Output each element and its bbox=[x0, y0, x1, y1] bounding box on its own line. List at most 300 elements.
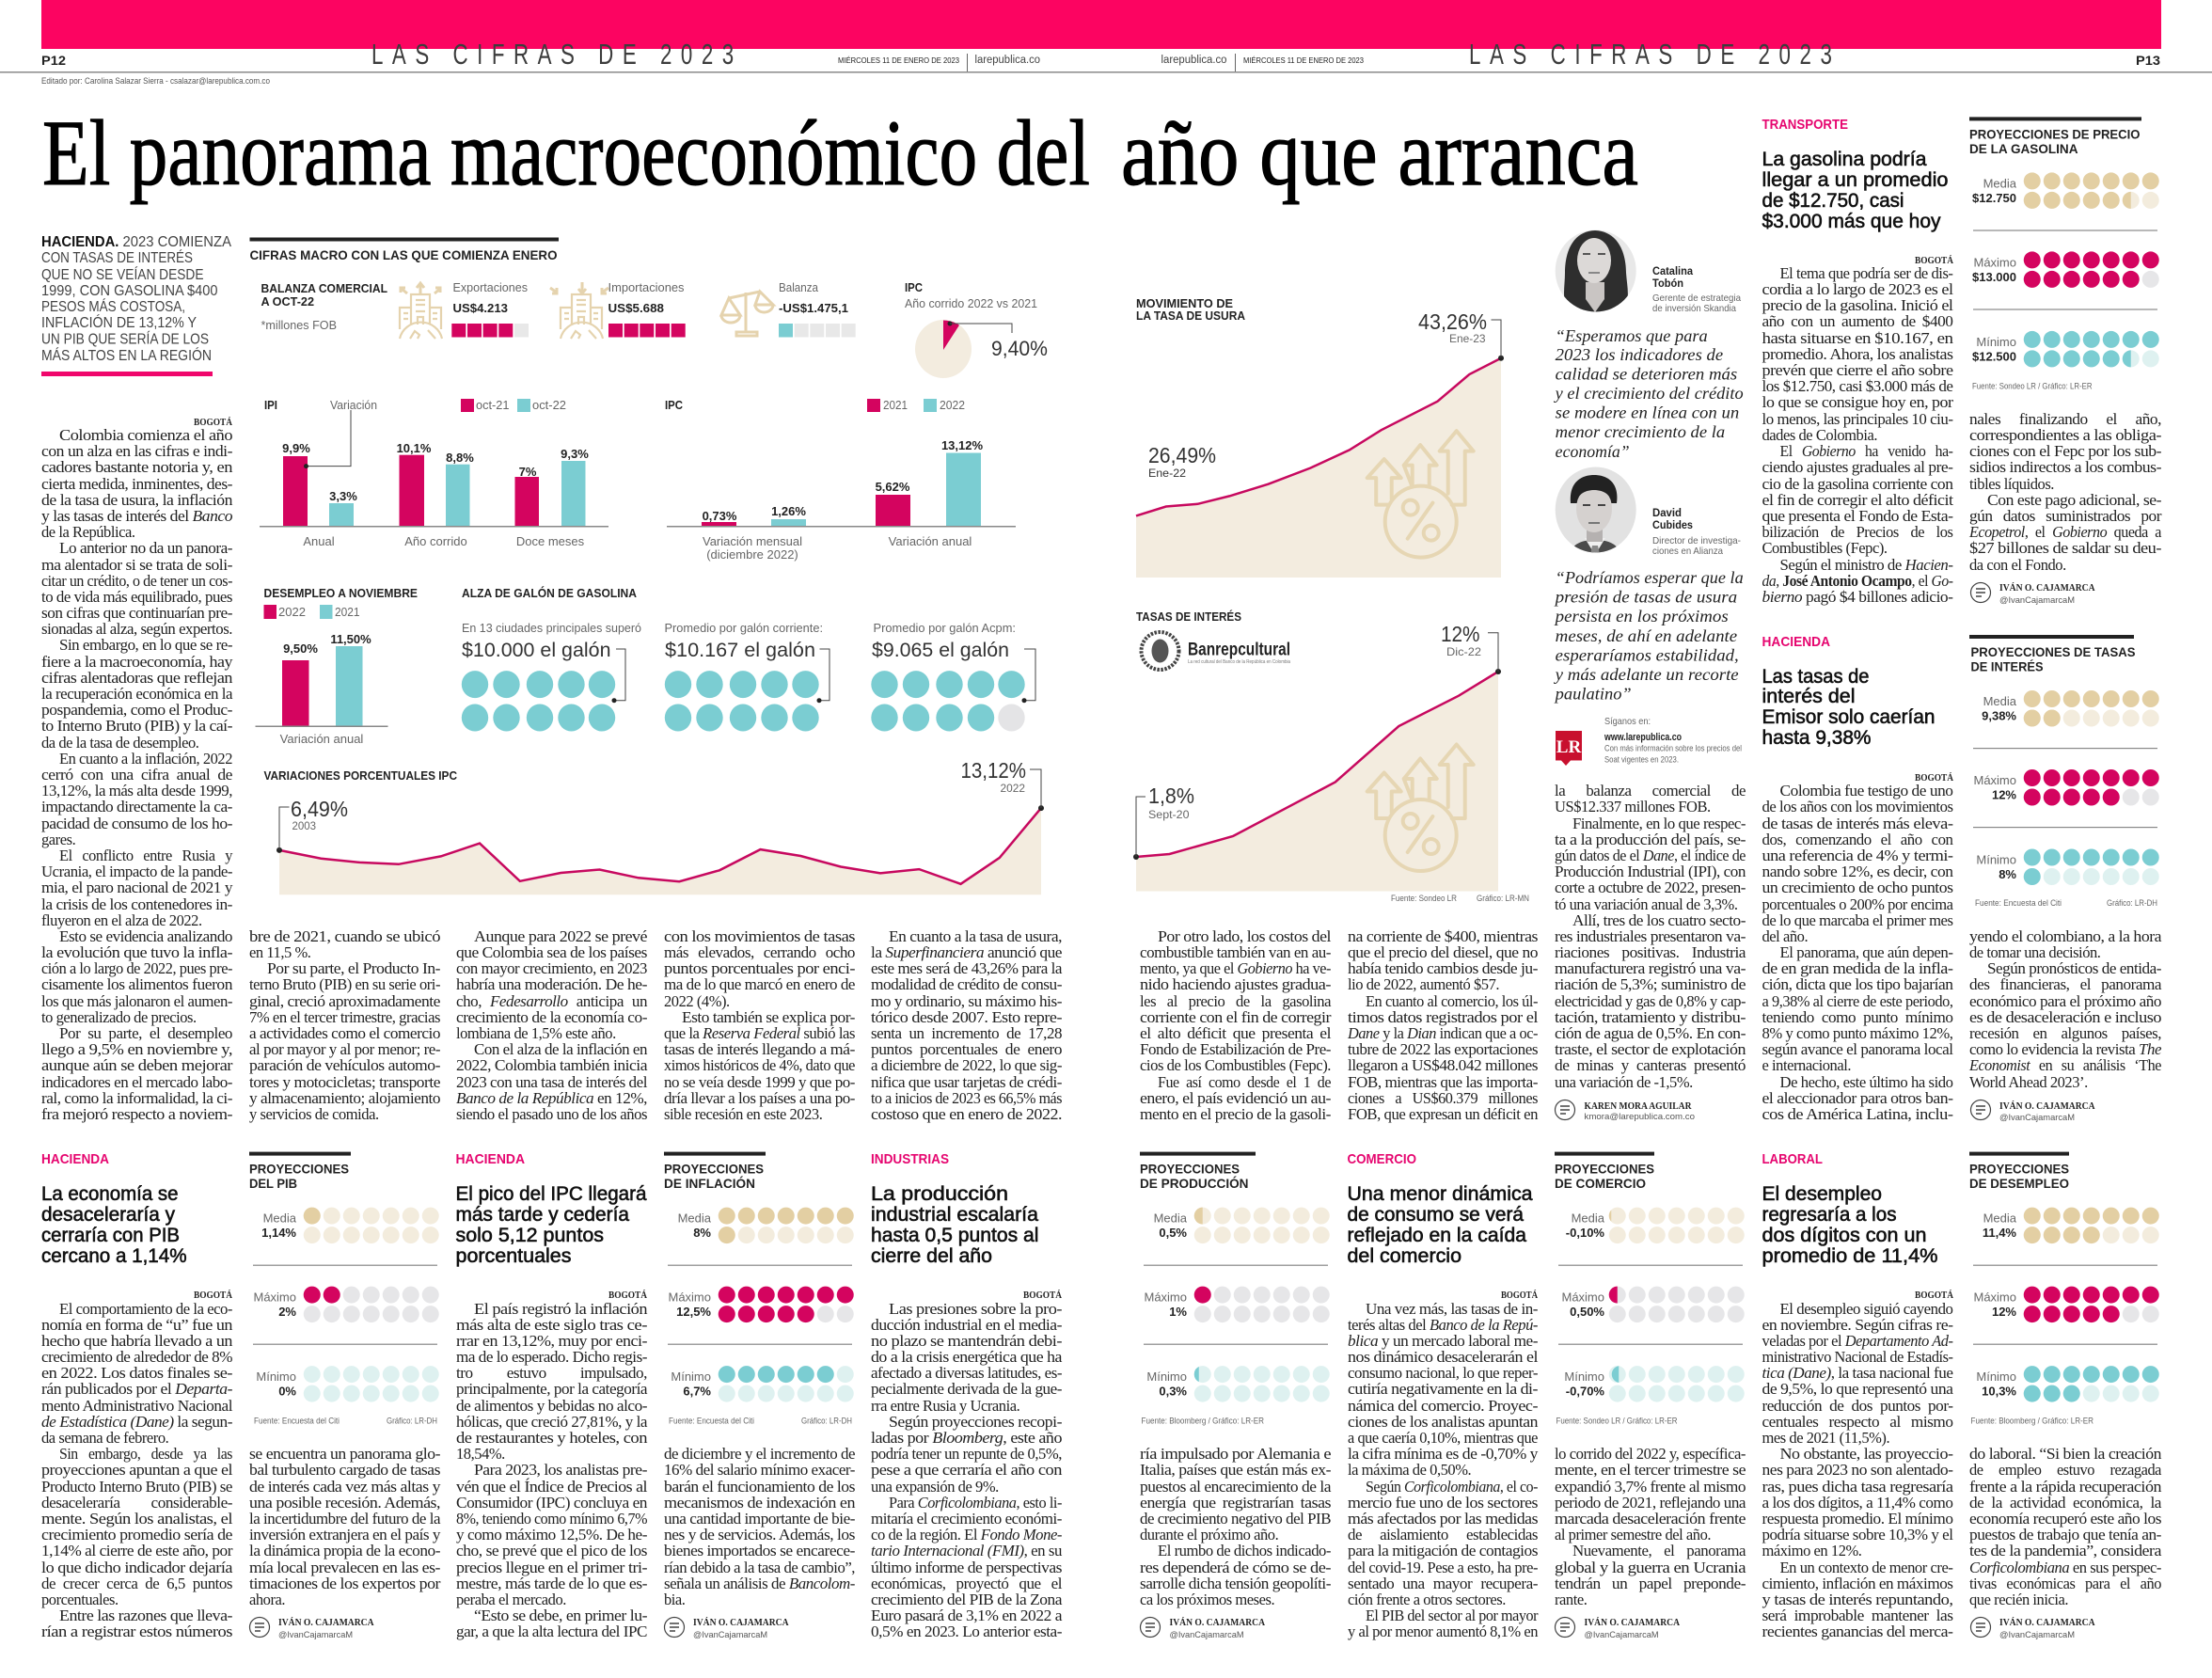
chart: variaciones porcentuales IPC: 2003 bbox=[292, 819, 316, 832]
text block: economía column 1: hecho que habría llevado a un bbox=[41, 1332, 232, 1350]
row labels: Mínimo bbox=[1976, 335, 2016, 349]
article heading: pico del IPC: HACIENDA bbox=[455, 1151, 525, 1167]
text block: comercio column 2: marcada desaceleración frente bbox=[1555, 1510, 1746, 1528]
text block: tasas column 1: e internacional. bbox=[1762, 1056, 1851, 1074]
quote: Catalina Tobón: calidad se deterioren más bbox=[1556, 365, 1737, 384]
article heading: Hacienda tasas: hasta 9,38% bbox=[1762, 727, 1872, 749]
text block: balanza comercial column: Finalmente, en lo que respec- bbox=[1572, 815, 1746, 832]
dot rows bbox=[727, 1216, 845, 1394]
text block: economía column 1: de Estadística (Dane) la segun- bbox=[41, 1413, 232, 1431]
text block: tasas column 1: cos de América Latina, inclu- bbox=[1762, 1105, 1953, 1123]
article heading: economía PIB: HACIENDA bbox=[41, 1151, 109, 1167]
text block: IPC column 1 bbox=[456, 1300, 648, 1640]
text block: producción column 2: res dependerá de cómo se de- bbox=[1140, 1559, 1331, 1576]
text block: gasolina column 2: tibles líquidos. bbox=[1969, 475, 2054, 493]
text block: comercio column 1: consumo nacional, lo que reper- bbox=[1348, 1364, 1538, 1382]
text block: balanza comercial column: tación, tratamiento y distribu- bbox=[1555, 1008, 1746, 1026]
text block: right page column 1 top: el alto déficit que presenta el bbox=[1140, 1024, 1332, 1042]
panel: alza de galón de gasolina: Promedio por galón Acpm: bbox=[873, 621, 1016, 635]
callout: síganos en larepublica.co: Con más información sobre los precios del bbox=[1604, 743, 1742, 752]
text block: column 5 top: nifica que usar tarjetas de crédi- bbox=[871, 1073, 1062, 1091]
text block: right page column 1 top: corriente con el fin de corregir bbox=[1140, 1008, 1332, 1026]
chart: tasas de interés: Gráfico: LR-MN bbox=[1477, 894, 1529, 903]
text block: IPC column 2: mecanismos de indexación en bbox=[664, 1494, 855, 1512]
row labels: Máximo bbox=[668, 1290, 711, 1305]
text block: column 5 top: a diciembre de 2022, lo que sig- bbox=[871, 1056, 1062, 1074]
text block: main article column 1: de la República. bbox=[41, 523, 135, 541]
text block: column 4 top bbox=[664, 927, 855, 1123]
text block: right page column 2 top: En cuanto al comercio, los úl- bbox=[1366, 992, 1538, 1010]
text block: column 3 top: Aunque para 2022 se prevé bbox=[474, 927, 647, 945]
text block: economía column 2 bbox=[249, 1445, 441, 1608]
text block: producción column 1: Según proyecciones recopi- bbox=[889, 1413, 1062, 1431]
text block: tasas column 2: World Ahead 2023’. bbox=[1969, 1073, 2088, 1091]
article heading: laboral: dos dígitos con un bbox=[1762, 1225, 1926, 1246]
text block: producción column 1: 0,5% en 2023. Lo anterior esta- bbox=[871, 1623, 1062, 1640]
text block: gasolina column 2 bbox=[1968, 410, 2162, 574]
panel: proyecciones de tasas de interés: Fuente: Encuesta del Citi bbox=[1975, 898, 2062, 908]
panel: balanza comercial: Importaciones bbox=[608, 280, 685, 294]
text block: laboral column 2: de empleo estuvo rezagada bbox=[1969, 1461, 2162, 1479]
text block: tasas column 2: como lo evidencia la revista The bbox=[1969, 1040, 2161, 1058]
text block: economía column 1: Producto Interno Bruto (PIB) se bbox=[41, 1478, 232, 1496]
panel heading: PROYECCIONES bbox=[1140, 1162, 1240, 1177]
text block: balanza comercial column: tó una variación anual de 3,3%. bbox=[1555, 895, 1738, 913]
text block: column 5 top: mo y ordinario, su máximo his- bbox=[871, 992, 1062, 1010]
page header bbox=[0, 38, 2212, 86]
text block: IPC column 1: 18,54%. bbox=[456, 1445, 505, 1463]
row labels: 12% bbox=[1992, 788, 2016, 801]
text block: economía column 1: mente. Según los analistas, el bbox=[41, 1510, 233, 1528]
byline: Iván O. Cajamarca comercio: IVÁN O. CAJAMARCA bbox=[1584, 1617, 1680, 1628]
text block: right page column 2 top: FOB, mientras que las importa- bbox=[1348, 1073, 1538, 1091]
text block: column 4 top: no se veía desde 1999 y que po- bbox=[664, 1073, 855, 1091]
panel: proyecciones de inflación: Gráfico: LR-DH bbox=[801, 1417, 852, 1426]
text block: laboral column 1: a los dos dígitos, a 11,4% como bbox=[1762, 1494, 1953, 1512]
byline: Iván O. Cajamarca IPC: IVÁN O. CAJAMARCA bbox=[693, 1617, 789, 1628]
text block: producción column 1: podría tener un repunte de 0,5%, bbox=[871, 1445, 1062, 1463]
quote: Catalina Tobón bbox=[1552, 226, 1744, 461]
article heading: pico del IPC: más tarde y cedería bbox=[455, 1204, 629, 1226]
chart: movimiento de la tasa de usura: Ene-22 bbox=[1148, 467, 1186, 480]
article heading: comercio bbox=[1347, 1151, 1539, 1301]
text block: right page column 2 top: FOB, que expresan un déficit en bbox=[1348, 1105, 1538, 1123]
panel heading bbox=[1969, 1152, 2069, 1191]
text block: gasolina column 1: da, José Antonio Ocampo, el Go- bbox=[1762, 572, 1952, 590]
panel: balanza comercial: Balanza bbox=[779, 280, 819, 294]
row labels: Media bbox=[1572, 1211, 1605, 1226]
text block: column 3 top: cho, Fedesarrollo anticipa un bbox=[456, 992, 647, 1010]
text block: comercio column 2: tendrán un papel preponde- bbox=[1555, 1575, 1746, 1592]
text block: main article column 1: los que más jalonaron el aumen- bbox=[41, 992, 232, 1010]
text block: main article column 1: Esto se evidencia analizando bbox=[59, 927, 232, 945]
text block: column 4 top: puntos porcentuales por enci- bbox=[664, 959, 855, 977]
text block: gasolina column 2: nales finalizando el año, bbox=[1969, 410, 2161, 428]
row labels: 8% bbox=[1999, 867, 2016, 881]
text block: balanza comercial column: res industriales presentaron va- bbox=[1555, 927, 1746, 945]
text block: main article column 1: fiere a la macroeconomía, hay bbox=[41, 653, 233, 671]
article heading: producción industrial: La producción bbox=[871, 1183, 1008, 1205]
text block: main article column 1: indicadores en el mercado labo- bbox=[41, 1073, 232, 1091]
text block: comercio column 1: ción frente a otros sectores. bbox=[1348, 1591, 1506, 1608]
text block: comercio column 1: la cifra mínima es de -0,70% y bbox=[1348, 1445, 1539, 1463]
text block: comercio column 2 bbox=[1555, 1445, 1746, 1608]
dateline: Bogotá: BOGOTÁ bbox=[194, 417, 233, 428]
dot rows bbox=[2032, 181, 2151, 367]
article: transporte gasolina: La gasolina podría bbox=[1762, 149, 1927, 170]
byline: Iván O. Cajamarca laboral: IVÁN O. CAJAMARCA bbox=[1999, 1617, 2095, 1628]
text block: comercio column 1: y al por menor aumentó 8,1% en bbox=[1348, 1623, 1538, 1640]
text block: comercio column 2: expandió 3,7% frente al mismo bbox=[1555, 1478, 1746, 1496]
row labels: 8% bbox=[693, 1226, 711, 1240]
deck: Hacienda summary bbox=[41, 234, 231, 376]
text block: column 5 top: En cuanto a la tasa de usura, bbox=[889, 927, 1062, 945]
text block: economía column 1: proyecciones apuntan a que el bbox=[41, 1461, 233, 1479]
chart: IPI bars bbox=[260, 398, 608, 548]
photo: David Cubides bbox=[1556, 467, 1636, 553]
text block: right page column 2 top: que el precio del diesel, que no bbox=[1348, 943, 1538, 961]
text block: comercio column 1: de aislamiento establecidas bbox=[1348, 1526, 1538, 1543]
icon: scale bbox=[721, 292, 773, 336]
text block: economía column 1: rían a registrar estos números bbox=[41, 1623, 232, 1640]
text block: tasas column 2: des financieras, el panorama bbox=[1969, 975, 2162, 993]
text block: column 2 top: bre de 2021, cuando se ubicó bbox=[249, 927, 440, 945]
chart: IPI bars: 7% bbox=[519, 465, 537, 479]
text block: main article column 1: ral, como la informalidad, la ci- bbox=[41, 1089, 232, 1107]
article heading: producción industrial bbox=[871, 1151, 1063, 1301]
panel: alza de galón de gasolina: $9.065 el galón bbox=[872, 640, 1009, 661]
text block: comercio column 2: Nuevamente, el panorama bbox=[1572, 1542, 1746, 1559]
logo: Banrepcultural bbox=[1142, 632, 1290, 670]
quote: David Cubides: Cubides bbox=[1652, 518, 1693, 531]
text block: IPC column 2: una cantidad importante de bie- bbox=[664, 1510, 855, 1528]
text block: producción column 1: no plazo se mantendrán debi- bbox=[871, 1332, 1062, 1350]
text block: column 4 top: 2022 (4%). bbox=[664, 992, 730, 1010]
byline: Iván O. Cajamarca comercio bbox=[1556, 1617, 1680, 1640]
text block: IPC column 1: Para 2023, los analistas pre- bbox=[474, 1461, 647, 1479]
text block: gasolina column 1: Según el ministro de Hacien- bbox=[1779, 556, 1952, 574]
chart: desempleo a noviembre: 9,50% bbox=[283, 641, 318, 656]
text block: column 4 top: más elevados, cerrando ocho bbox=[664, 943, 855, 961]
deck: Hacienda summary: PESOS MÁS COSTOSA, bbox=[41, 297, 185, 315]
text block: gasolina column 1: lo menos, las principales 10 ciu- bbox=[1762, 410, 1952, 428]
panel heading bbox=[1140, 1152, 1256, 1191]
panel: proyecciones de precio de la gasolina: Fuente: Sondeo LR / Gráfico: LR-ER bbox=[1972, 381, 2093, 390]
deck: Hacienda summary: QUE NO SE VEÍAN DESDE bbox=[41, 265, 203, 283]
text block: comercio column 1: námica del comercio. Proyec- bbox=[1348, 1397, 1538, 1415]
chart: IPC bars: 1,26% bbox=[771, 504, 806, 518]
quote: David Cubides: presión de tasas de usura bbox=[1554, 588, 1737, 607]
text block: IPC column 2: señala un análisis de Bancolom- bbox=[664, 1575, 855, 1592]
row labels: Media bbox=[1983, 176, 2017, 190]
text block: main article column 1: to Interno Bruto (PIB) y la caí- bbox=[41, 717, 232, 735]
text block: IPC column 2: rían debido a la tasa de cambio”, bbox=[664, 1559, 855, 1576]
article heading: comercio: de consumo se verá bbox=[1347, 1204, 1524, 1226]
text block: column 2 top: Por su parte, el Producto In- bbox=[267, 959, 440, 977]
text block: producción column 2: Italia, países que están más ex- bbox=[1140, 1461, 1331, 1479]
dot rows bbox=[2032, 1216, 2151, 1394]
text block: economía column 2: mía local prevalecen en las es- bbox=[249, 1559, 440, 1576]
text block: producción column 1: co de la región. El Fondo Mone- bbox=[871, 1526, 1062, 1543]
row labels: Máximo bbox=[253, 1290, 296, 1305]
deck: Hacienda summary: HACIENDA. 2023 COMIENZA bbox=[41, 234, 231, 250]
row labels: -0,10% bbox=[1566, 1226, 1604, 1240]
article heading: Hacienda tasas: HACIENDA bbox=[1762, 634, 1830, 650]
panel: balanza comercial: *millones FOB bbox=[261, 318, 337, 332]
row labels: Media bbox=[1154, 1211, 1188, 1226]
text block: tasas column 1: ción, dicta que los tipo bajarían bbox=[1762, 975, 1953, 993]
dot rows bbox=[312, 1216, 431, 1394]
text block: laboral column 1: respuesta promedio. El mínimo bbox=[1762, 1510, 1953, 1528]
chart: IPI bars: 10,1% bbox=[397, 441, 432, 455]
text block: main article column 1: de la tasa de usura, la inflación bbox=[41, 491, 232, 509]
text block: column 3 top: lombiana de 1,5% este año. bbox=[456, 1024, 616, 1042]
panel: proyecciones de tasas de interés bbox=[1969, 635, 2157, 908]
panel: proyecciones de inflación bbox=[664, 1152, 852, 1426]
text block: producción column 1: económicas, proyectó que el bbox=[871, 1575, 1063, 1592]
text block: economía column 1: mento Administrativo Nacional bbox=[41, 1397, 233, 1415]
panel heading: DE LA GASOLINA bbox=[1969, 141, 2078, 156]
text block: main article column 1: aunque aún se deben mejorar bbox=[41, 1056, 233, 1074]
text block: economía column 1: rán publicados por el Departa- bbox=[41, 1380, 232, 1398]
chart: desempleo a noviembre: Variación anual bbox=[280, 732, 363, 746]
byline: Iván O. Cajamarca producción: @IvanCajamarcaM bbox=[1170, 1630, 1244, 1640]
panel: proyecciones de inflación: Fuente: Encuesta del Citi bbox=[669, 1417, 754, 1426]
text block: comercio column 1: Según Corficolombiana, el co- bbox=[1366, 1478, 1538, 1496]
article heading: economía PIB: desaceleraría y bbox=[41, 1204, 175, 1226]
text block: main article column 1: El conflicto entre Rusia y bbox=[59, 847, 233, 864]
text block: IPC column 1: rrar en 13,12%, muy por enci- bbox=[456, 1332, 647, 1350]
text block: IPC column 1: tro estuvo impulsado, bbox=[456, 1364, 647, 1382]
text block: right page column 1 top: mento, ya que el Gobierno ha ve- bbox=[1140, 959, 1331, 977]
article heading: producción industrial: industrial escalaría bbox=[871, 1204, 1038, 1226]
panel: balanza comercial bbox=[261, 280, 856, 339]
text block: economía column 1: porcentuales. bbox=[41, 1591, 118, 1608]
text block: producción column 1: Euro pasará de 3,1% en 2022 a bbox=[871, 1607, 1063, 1624]
chart: desempleo a noviembre: 2022 bbox=[278, 605, 306, 619]
byline: Iván O. Cajamarca tasas bbox=[1971, 1100, 2095, 1123]
text block: IPC column 1: y como máximo 12,5%. De he- bbox=[456, 1526, 647, 1543]
panel: proyecciones de precio de la gasolina bbox=[1969, 117, 2157, 390]
text block: column 3 top: siendo el pasado uno de los años bbox=[456, 1105, 647, 1123]
text block: main article column 1: y las tasas de interés del Banco bbox=[41, 507, 232, 525]
byline: Iván O. Cajamarca economía bbox=[250, 1617, 374, 1640]
quote: David Cubides: ciones en Alianza bbox=[1652, 546, 1723, 557]
text block: comercio column 1: Una vez más, las tasas de in- bbox=[1366, 1300, 1538, 1318]
text block: balanza comercial column: electricidad y gas de 0,8% y cap- bbox=[1555, 992, 1746, 1010]
byline: Iván O. Cajamarca laboral bbox=[1971, 1617, 2095, 1640]
text block: IPC column 1: precios llegue en el primer tri- bbox=[456, 1559, 647, 1576]
text block: tasas column 1: de lo que marcaba el primer mes bbox=[1762, 911, 1953, 929]
text block: gasolina column 1: prevén que cierre el año sobre bbox=[1762, 361, 1953, 379]
text block: tasas column 1: teniendo como punto mínimo bbox=[1762, 1008, 1953, 1026]
row labels: Mínimo bbox=[1976, 852, 2016, 867]
text block: tasas column 1: Colombia fue testigo de uno bbox=[1779, 782, 1953, 799]
panel heading bbox=[1555, 1152, 1654, 1191]
text block: laboral column 1: En un contexto de menor cre- bbox=[1779, 1559, 1952, 1576]
text block: economía column 1: Entre las razones que lleva- bbox=[59, 1607, 232, 1624]
text block: gasolina column 2: da con el Fondo. bbox=[1969, 556, 2066, 574]
text block: right page column 2 top: timos datos registrados por el bbox=[1348, 1008, 1539, 1026]
text block: comercio column 2: global y la guerra en Ucrania bbox=[1555, 1559, 1746, 1576]
text block: tasas column 1: El panorama, que aún depen- bbox=[1779, 943, 1952, 961]
panel heading: DE COMERCIO bbox=[1555, 1176, 1646, 1191]
text block: column 5 top: tórico desde 2007. Esto repre- bbox=[871, 1008, 1062, 1026]
text block: comercio column 1: cutiría negativamente en la di- bbox=[1348, 1380, 1538, 1398]
byline: Iván O. Cajamarca economía: IVÁN O. CAJAMARCA bbox=[278, 1617, 374, 1628]
text block: column 4 top: que la Reserva Federal subió las bbox=[664, 1024, 855, 1042]
chart: tasas de interés: Sept-20 bbox=[1148, 808, 1190, 821]
byline: Iván O. Cajamarca tasas: @IvanCajamarcaM bbox=[1999, 1113, 2075, 1123]
text block: producción column 1: mitaría el crecimiento económi- bbox=[871, 1510, 1062, 1528]
article heading: pico del IPC bbox=[455, 1151, 648, 1301]
text block: balanza comercial column: US$12.337 millones FOB. bbox=[1555, 798, 1711, 815]
article heading: pico del IPC: solo 5,12 puntos bbox=[455, 1225, 604, 1246]
article heading: producción industrial: cierre del año bbox=[871, 1245, 992, 1267]
text block: laboral column 1: y tasas de interés repuntando, bbox=[1762, 1591, 1953, 1608]
text block: column 5 top: modalidad de crédito de consu- bbox=[871, 975, 1062, 993]
text block: right page column 1 top: Fondo de Estabilización de Pre- bbox=[1140, 1040, 1331, 1058]
quote: David Cubides: “Podríamos esperar que la bbox=[1556, 568, 1744, 587]
panel: proyecciones del PIB: Gráfico: LR-DH bbox=[387, 1417, 437, 1426]
text block: laboral column 2: puestos de trabajo que tenía an- bbox=[1969, 1526, 2161, 1543]
squares: exportaciones bbox=[451, 324, 529, 337]
row labels bbox=[1973, 694, 2017, 881]
panel: proyecciones de desempleo bbox=[1969, 1152, 2157, 1426]
text block: laboral column 2: economía recuperó este año los bbox=[1969, 1510, 2161, 1528]
quote: Catalina Tobón: de inversión Skandia bbox=[1652, 303, 1736, 314]
text block: balanza comercial column: gún datos de el Dane, el índice de bbox=[1555, 847, 1746, 864]
article: transporte gasolina: BOGOTÁ bbox=[1915, 255, 1954, 266]
byline: Karen Mora Aguilar: kmora@larepublica.com.co bbox=[1584, 1112, 1695, 1122]
text block: column 2 top: paración de vehículos automo- bbox=[249, 1056, 440, 1074]
text block: economía column 1: nomía en forma de “u” fue un bbox=[41, 1316, 232, 1334]
chart: movimiento de la tasa de usura: MOVIMIENTO DE bbox=[1136, 296, 1233, 310]
chart: IPC pie: Año corrido 2022 vs 2021 bbox=[905, 296, 1037, 310]
panel heading: DEL PIB bbox=[249, 1176, 297, 1191]
text block: column 4 top: sible recesión en este 2023. bbox=[664, 1105, 823, 1123]
text block: main article column 1: fluyeron en el alza de 2022. bbox=[41, 911, 202, 929]
squares: importaciones bbox=[608, 324, 686, 337]
text block: column 2 top: a actividades como el comercio bbox=[249, 1024, 440, 1042]
text block: comercio column 2: lo corrido del 2022 y, específica- bbox=[1555, 1445, 1746, 1463]
text block: economía column 1: Sin embargo, desde ya las bbox=[59, 1445, 232, 1463]
text block: column 2 top: 7% en el tercer trimestre, gracias bbox=[249, 1008, 440, 1026]
page header: larepublica.co bbox=[1161, 55, 1226, 66]
chart: IPI bars: Año corrido bbox=[404, 534, 467, 548]
text block: main article column 1: cadores bastante notoria y, en bbox=[41, 458, 232, 476]
text block: IPC column 1: hólicas, que creció 27,81%, y la bbox=[456, 1413, 648, 1431]
quote: David Cubides: David bbox=[1652, 506, 1682, 519]
chart: IPC bars: 2021 bbox=[883, 398, 908, 412]
article: transporte gasolina bbox=[1762, 117, 1954, 266]
icon: percent with rising arrows bbox=[1367, 431, 1474, 558]
panel: alza de galón de gasolina: ALZA DE GALÓN DE GASOLINA bbox=[462, 586, 638, 600]
text block: gasolina column 2: $27 billones de saldar su deu- bbox=[1969, 539, 2161, 557]
text block: comercio column 2: rante. bbox=[1555, 1591, 1588, 1608]
text block: economía column 1: en 2022. Los datos finales se- bbox=[41, 1364, 232, 1382]
text block: gasolina column 1: año con un aumento de $400 bbox=[1762, 312, 1953, 330]
chart: tasas de interés: Dic-22 bbox=[1446, 645, 1481, 658]
page header: LAS CIFRAS DE 2023 bbox=[371, 38, 734, 71]
text block: right page column 1 top: Por otro lado, los costos del bbox=[1158, 927, 1332, 945]
text block: balanza comercial column: riaciones positivas. Industria bbox=[1555, 943, 1746, 961]
panel heading: PROYECCIONES bbox=[1555, 1162, 1654, 1177]
text block: producción column 2: energía que registrarían tasas bbox=[1140, 1494, 1331, 1512]
text block: IPC column 1: principalmente, por la categoría bbox=[456, 1380, 648, 1398]
text block: economía column 2: la dinámica propia de la econo- bbox=[249, 1542, 440, 1559]
text block: IPC column 1: más alta de este siglo tras ce- bbox=[456, 1316, 647, 1334]
text block: comercio column 1: terés altas del Banco de la Repú- bbox=[1348, 1316, 1538, 1334]
byline: Iván O. Cajamarca producción bbox=[1140, 1617, 1265, 1640]
text block: laboral column 1: El desempleo siguió cayendo bbox=[1779, 1300, 1953, 1318]
article heading: producción industrial: hasta 0,5 puntos al bbox=[871, 1225, 1038, 1246]
quote: Catalina Tobón: se modere en línea con un bbox=[1556, 403, 1739, 421]
chart: movimiento de la tasa de usura bbox=[1136, 296, 1504, 578]
text block: laboral column 1: mes de 2021 (11,5%). bbox=[1762, 1429, 1889, 1447]
chart: IPC bars: 0,73% bbox=[703, 509, 737, 523]
row labels: Máximo bbox=[1973, 773, 2016, 787]
text block: producción column 2: puestos al encarecimiento de la bbox=[1140, 1478, 1332, 1496]
article heading: laboral: regresaría a los bbox=[1762, 1204, 1896, 1226]
text block: producción column 1: tario Internacional (FMI), en su bbox=[871, 1542, 1062, 1559]
article heading: comercio: BOGOTÁ bbox=[1501, 1290, 1539, 1301]
panel: proyecciones de producción bbox=[1140, 1152, 1328, 1426]
page header: P13 bbox=[2136, 53, 2160, 68]
chart: IPI bars: IPI bbox=[264, 398, 277, 412]
article heading: economía PIB: cercano a 1,14% bbox=[41, 1245, 186, 1267]
text block: right page column 1 top: enero, el país evidenció un au- bbox=[1140, 1089, 1331, 1107]
chart: IPI bars: 8,8% bbox=[446, 451, 474, 465]
text block: column 3 top: con mayor crecimiento, en 2023 bbox=[456, 959, 647, 977]
text block: producción column 1: crecimiento del PIB de la Zona bbox=[871, 1591, 1063, 1608]
top pink band bbox=[41, 0, 2161, 49]
text block: right page column 1 top: mento en el precio de la gasoli- bbox=[1140, 1105, 1331, 1123]
text block: balanza comercial column: ción de agua de 0,5%. En con- bbox=[1555, 1024, 1746, 1042]
panel: alza de galón de gasolina: $10.000 el galón bbox=[462, 640, 611, 661]
article heading: Hacienda tasas: Emisor solo caerían bbox=[1762, 706, 1936, 728]
text block: producción column 1 bbox=[871, 1300, 1063, 1640]
text block: tasas column 2: Según pronósticos de entida- bbox=[1987, 959, 2161, 977]
row labels bbox=[1561, 1211, 1605, 1399]
text block: tasas column 1: de tasas de interés más eleva- bbox=[1762, 815, 1952, 832]
text block: comercio column 1: la máxima de 0,50%. bbox=[1348, 1461, 1472, 1479]
text block: comercio column 1: a que caería 0,10%, mientras que bbox=[1348, 1429, 1538, 1447]
text block: laboral column 2: tivas económicas para el año bbox=[1969, 1575, 2161, 1592]
text block: main article column 1: la crisis de los contenedores in- bbox=[41, 895, 232, 913]
text block: column 2 top bbox=[249, 927, 440, 1123]
text block: main article column 1: la evolución que tuvo la infla- bbox=[41, 943, 232, 961]
text block: tasas column 1: de en gran medida de la infla- bbox=[1762, 959, 1952, 977]
text block: laboral column 1: reducción de dos puntos por- bbox=[1762, 1397, 1953, 1415]
text block: right page column 2 top: ciones a US$60.379 millones bbox=[1348, 1089, 1538, 1107]
deck: Hacienda summary: INFLACIÓN DE 13,12% Y bbox=[41, 313, 197, 331]
text block: column 2 top: y almacenamiento; alojamiento bbox=[249, 1089, 440, 1107]
panel: balanza comercial: US$4.213 bbox=[453, 301, 508, 315]
text block: column 4 top: dría llevar a los países a una po- bbox=[664, 1089, 855, 1107]
text block: economía column 1: de crecer cerca de 6,5 puntos bbox=[41, 1575, 232, 1592]
row labels bbox=[1973, 1211, 2017, 1399]
row labels: $12.750 bbox=[1972, 191, 2016, 205]
chart: movimiento de la tasa de usura: 43,26% bbox=[1418, 309, 1487, 334]
text block: producción column 1: ducción industrial en el media- bbox=[871, 1316, 1062, 1334]
panel: balanza comercial: US$5.688 bbox=[608, 301, 664, 315]
text block: producción column 1: pese a que cerraría el año con bbox=[871, 1461, 1062, 1479]
text block: laboral column 2: de la actividad económica, la bbox=[1969, 1494, 2162, 1512]
icon: exportaciones building bbox=[400, 283, 442, 339]
chart: IPC bars bbox=[665, 398, 1016, 562]
panel: proyecciones del PIB: Fuente: Encuesta del Citi bbox=[254, 1417, 340, 1426]
